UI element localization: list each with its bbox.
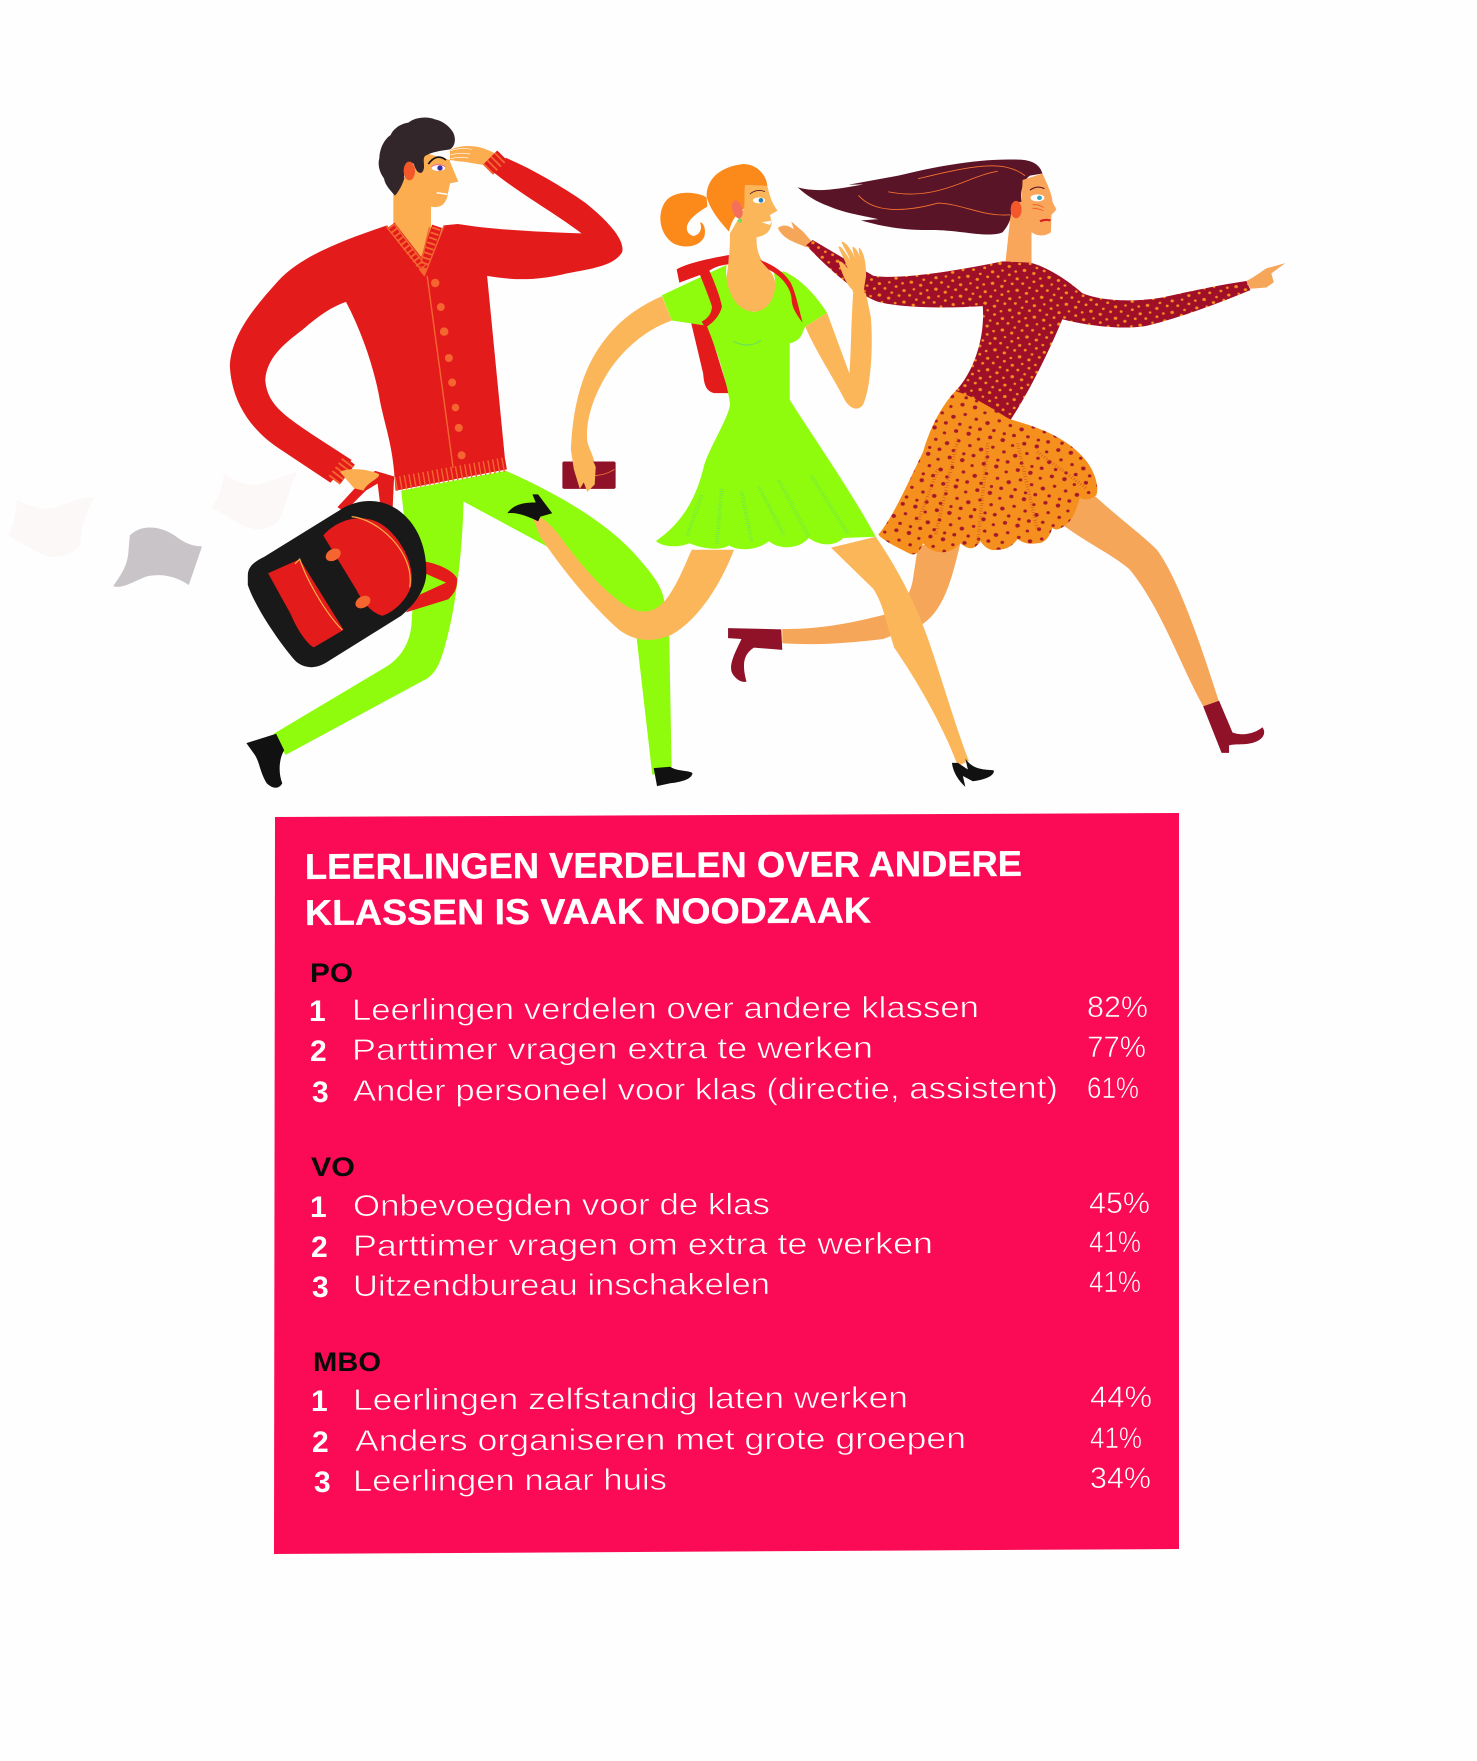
section: PO: Parttimer vragen extra te werken: [352, 1032, 873, 1067]
illustration: flying papers: [8, 472, 297, 587]
section: PO: 2: [310, 1035, 327, 1068]
section: MBO: Leerlingen naar huis: [353, 1464, 667, 1498]
section: MBO: MBO: [313, 1347, 381, 1377]
panel: pink results box: [274, 813, 1179, 1554]
section: PO: PO: [310, 958, 353, 988]
section: PO: 3: [312, 1076, 329, 1109]
illustration: running girl in green dress: [507, 164, 994, 787]
sweater and backpack: [230, 156, 623, 667]
head and ponytail: [660, 164, 778, 312]
backpack straps: [337, 471, 457, 612]
heading: KLASSEN IS VAAK NOODZAAK: [305, 890, 871, 933]
head: [379, 118, 495, 263]
buttons: [431, 279, 466, 459]
section: VO: VO: [311, 1152, 355, 1182]
heading: LEERLINGEN VERDELEN OVER ANDERE: [305, 843, 1022, 887]
lower hand: [340, 469, 379, 491]
boots: [728, 628, 1264, 753]
section: MBO: 3: [314, 1466, 331, 1499]
section: VO: [310, 1152, 1150, 1304]
section: VO: Uitzendbureau inschakelen: [353, 1268, 770, 1303]
section: VO: 3: [312, 1271, 329, 1304]
section: VO: Onbevoegden voor de klas: [353, 1188, 770, 1223]
hair highlights: [858, 166, 1025, 215]
illustration: running man with backpack: [230, 118, 692, 788]
front leg: [1052, 489, 1219, 708]
heading: [305, 843, 1022, 933]
section: MBO: 34%: [1090, 1462, 1151, 1495]
section: VO: 41%: [1089, 1226, 1141, 1259]
hands: [778, 221, 1285, 289]
section: MBO: 1: [311, 1385, 328, 1418]
section: VO: 1: [310, 1191, 327, 1224]
raised heel: [507, 494, 552, 521]
collar, hem and cuffs: [334, 156, 506, 484]
dress and front arm: [656, 265, 876, 549]
dress top: [806, 240, 1250, 421]
hair: [798, 159, 1042, 235]
section: MBO: [311, 1347, 1152, 1499]
face and neck: [1005, 174, 1056, 265]
section: PO: [309, 958, 1148, 1109]
section: MBO: 2: [312, 1426, 329, 1459]
backpack, legs, arm and clutch: [533, 296, 994, 787]
section: VO: 45%: [1089, 1187, 1150, 1220]
section: VO: 2: [311, 1231, 328, 1264]
ear and face details: [1011, 187, 1050, 221]
section: MBO: 41%: [1090, 1422, 1142, 1455]
section: VO: 41%: [1089, 1266, 1141, 1299]
section: PO: 1: [309, 995, 326, 1028]
backpack: [248, 501, 426, 667]
skirt: [878, 391, 1097, 554]
section: MBO: Leerlingen zelfstandig laten werken: [353, 1382, 908, 1417]
backpack straps and raised hand: [677, 242, 866, 328]
section: PO: 77%: [1087, 1031, 1146, 1064]
section: PO: 61%: [1087, 1072, 1139, 1105]
section: VO: Parttimer vragen om extra te werken: [353, 1227, 933, 1263]
section: MBO: Anders organiseren met grote groepen: [355, 1422, 966, 1458]
skirt pleats: [918, 439, 1087, 543]
illustration: running woman with polka dot dress: [728, 159, 1285, 753]
section: PO: Ander personeel voor klas (directie, assistent): [353, 1072, 1058, 1108]
back leg: [782, 543, 960, 644]
section: PO: Leerlingen verdelen over andere klassen: [352, 991, 979, 1027]
trousers and shoes: [246, 471, 692, 788]
section: MBO: 44%: [1090, 1381, 1152, 1414]
section: PO: 82%: [1087, 991, 1148, 1024]
